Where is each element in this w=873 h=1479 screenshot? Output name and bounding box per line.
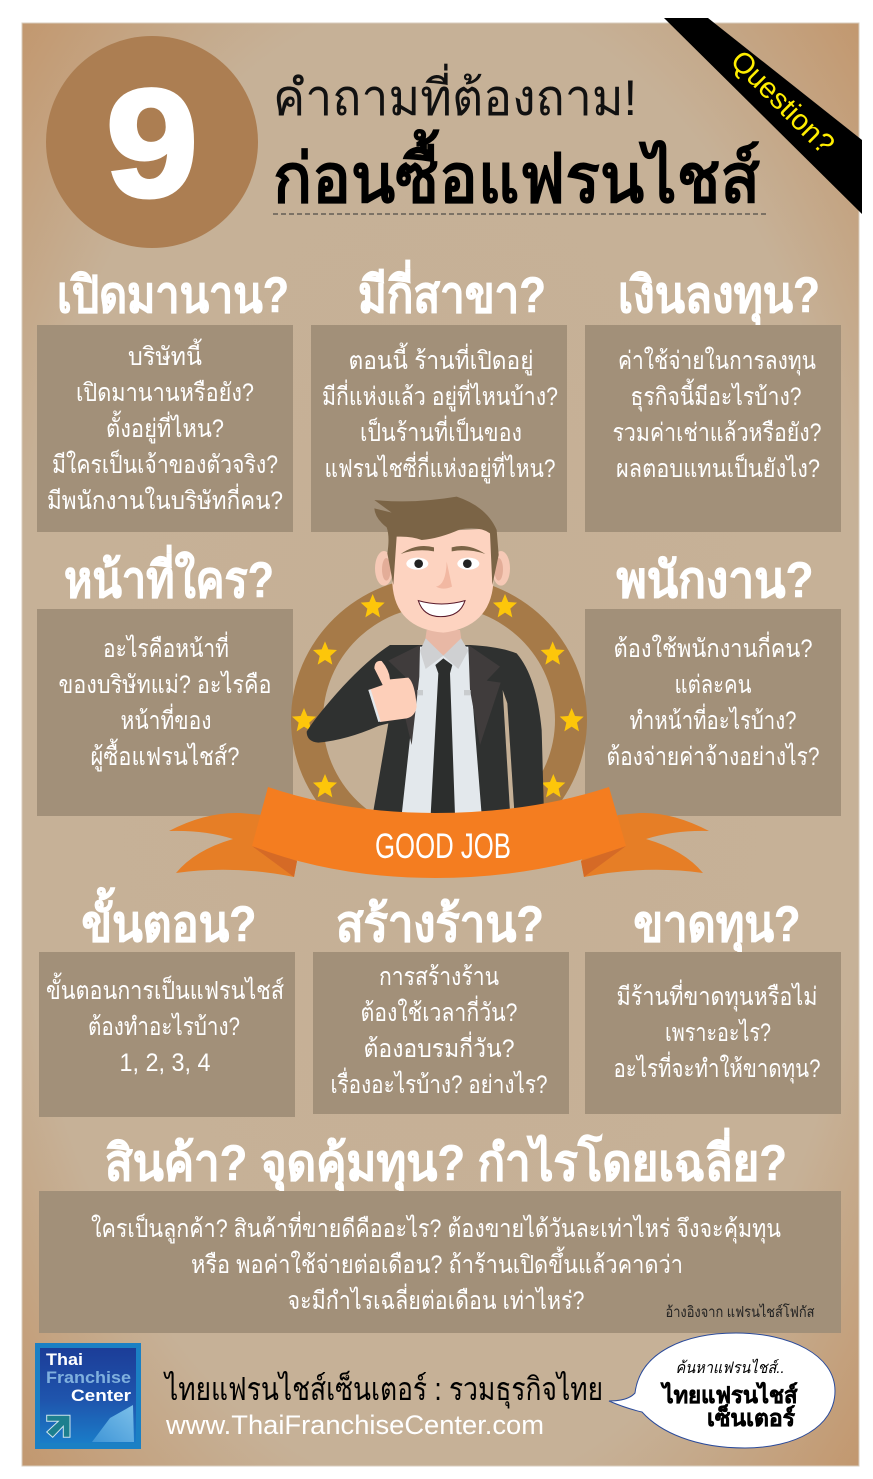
answer text: มีกี่แห่งแล้ว อยู่ที่ไหนบ้าง?: [322, 379, 558, 412]
answer text: การสร้างร้าน: [379, 963, 499, 991]
bubble name: ไทยแฟรนไชส์: [660, 1381, 798, 1408]
logo arrow: [47, 1415, 70, 1437]
heading: ขาดทุน?: [634, 896, 800, 955]
question 1: how long open: [37, 267, 293, 532]
heading: พนักงาน?: [616, 552, 814, 608]
answer text: เรื่องอะไรบ้าง? อย่างไร?: [330, 1067, 548, 1099]
answer text: [91, 1211, 781, 1315]
speech bubble: เซ็นเตอร์: [707, 1403, 796, 1431]
answer box: [313, 952, 569, 1114]
heading: เงินลงทุน?: [618, 267, 820, 326]
answer text: รวมค่าเช่าแล้วหรือยัง?: [612, 419, 822, 447]
answer text: ต้องใช้พนักงานกี่คน?: [614, 631, 812, 663]
answer text: ผู้ซื้อแฟรนไชส์?: [90, 738, 240, 772]
answer text: [46, 972, 284, 1077]
answer text: ใครเป็นลูกค้า? สินค้าที่ขายดีคืออะไร? ต้องขายได้วันละเท่าไหร่ จึงจะคุ้มทุน: [91, 1211, 781, 1244]
bubble caption: ค้นหาแฟรนไชส์..: [676, 1358, 784, 1377]
stars: [292, 594, 584, 797]
heading: เปิดมานาน?: [57, 267, 289, 323]
right ribbon tail: [581, 813, 709, 877]
lapels: [388, 645, 420, 745]
answer text: [47, 338, 283, 515]
smile: [418, 601, 465, 617]
shirt: [402, 647, 482, 815]
answer text: [614, 979, 820, 1084]
answer text: หน้าที่ของ: [120, 703, 212, 735]
answer box: [37, 609, 293, 816]
heading: หน้าที่ใคร?: [64, 545, 274, 608]
neck: [425, 630, 462, 656]
ears: [375, 551, 393, 586]
answer text: อะไรที่จะทำให้ขาดทุน?: [614, 1051, 820, 1084]
header: number nine title: [46, 36, 767, 248]
banner: good job: [169, 787, 709, 878]
answer text: [322, 342, 558, 484]
number 9: 9: [106, 58, 198, 229]
ribbon label: Question?: [724, 45, 840, 161]
answer text: ของบริษัทแม่? อะไรคือ: [58, 670, 272, 699]
source note: อ้างอิงจาก แฟรนไชส์โฟกัส: [666, 1303, 814, 1321]
nose: [436, 562, 452, 589]
question 9: product, break-even, average profit: [39, 1128, 841, 1333]
answer text: ค่าใช้จ่ายในการลงทุน: [618, 346, 816, 376]
answer text: [606, 631, 820, 771]
answer text: เป็นร้านที่เป็นของ: [360, 415, 522, 447]
answer text: จะมีกำไรเฉลี่ยต่อเดือน เท่าไหร่?: [288, 1283, 584, 1315]
answer text: มีใครเป็นเจ้าของตัวจริง?: [52, 449, 278, 479]
answer text: ต้องอบรมกี่วัน?: [364, 1031, 514, 1063]
answer text: ทำหน้าที่อะไรบ้าง?: [630, 703, 796, 735]
answer text: ตั้งอยู่ที่ไหน?: [106, 410, 224, 444]
left ribbon tail: [169, 813, 297, 877]
ribbon label: GOOD JOB: [375, 827, 511, 866]
heading: สินค้า? จุดคุ้มทุน? กำไรโดยเฉลี่ย?: [105, 1128, 787, 1194]
answer box: [311, 325, 567, 532]
logo text: Thai: [46, 1350, 83, 1369]
answer text: มีพนักงานในบริษัทกี่คน?: [47, 483, 283, 515]
question 6: steps: [39, 887, 295, 1117]
shirt buttons: [417, 690, 423, 695]
answer text: 1, 2, 3, 4: [120, 1049, 211, 1077]
answer text: ต้องทำอะไรบ้าง?: [88, 1012, 240, 1041]
title line one: คำถามที่ต้องถาม!: [273, 64, 637, 126]
question 3: investment money: [585, 267, 841, 532]
website: www.ThaiFranchiseCenter.com: [165, 1410, 544, 1440]
face: [392, 528, 493, 633]
heading: ขั้นตอน?: [82, 887, 256, 952]
question 4: whose duty: [37, 545, 293, 816]
answer box: [37, 325, 293, 532]
answer text: ผลตอบแทนเป็นยังไง?: [616, 453, 820, 483]
logo: Thai Franchise Center: Franchise: [46, 1368, 131, 1387]
site name: ไทยแฟรนไชส์เซ็นเตอร์ : รวมธุรกิจไทย: [163, 1370, 603, 1409]
thumbs-up hand: [368, 661, 417, 722]
title line two: ก่อนซื้อแฟรนไชส์: [273, 128, 760, 217]
footer text: [163, 1370, 603, 1440]
collar: [420, 638, 443, 669]
ribbon band: [252, 787, 626, 878]
answer box: [585, 325, 841, 532]
hair: [374, 497, 499, 585]
answer text: [330, 963, 548, 1099]
answer text: บริษัทนี้: [128, 338, 202, 371]
answer text: เปิดมานานหรือยัง?: [76, 379, 254, 407]
answer text: แต่ละคน: [674, 671, 752, 699]
answer box: [585, 609, 841, 816]
heading: สร้างร้าน?: [336, 896, 544, 952]
answer box: [585, 952, 841, 1114]
eyebrows: [401, 546, 434, 554]
question 7: building the shop: [313, 896, 569, 1114]
answer text: [58, 631, 272, 772]
number circle: [46, 36, 258, 248]
question 2: branches: [311, 260, 567, 532]
answer box: [39, 952, 295, 1117]
logo: Thai Franchise Center: Center: [71, 1386, 131, 1405]
answer text: อะไรคือหน้าที่: [103, 631, 229, 663]
answer text: มีร้านที่ขาดทุนหรือไม่: [616, 979, 818, 1012]
answer text: เพราะอะไร?: [665, 1018, 771, 1047]
answer text: หรือ พอค่าใช้จ่ายต่อเดือน? ถ้าร้านเปิดขึ้นแล้วคาดว่า: [191, 1246, 683, 1279]
answer box: [39, 1191, 841, 1333]
logo: Thai Franchise Center: [35, 1343, 141, 1449]
answer text: ต้องจ่ายค่าจ้างอย่างไร?: [606, 742, 820, 771]
corner ribbon: question: [664, 18, 862, 214]
illustration: businessman in star ring: [291, 497, 587, 864]
eyes: [406, 558, 428, 570]
heading: มีกี่สาขา?: [358, 260, 546, 323]
answer text: ต้องใช้เวลากี่วัน?: [360, 995, 518, 1027]
star ring: [291, 576, 587, 864]
question 8: loss: [585, 896, 841, 1114]
jacket: [307, 645, 544, 815]
answer text: ขั้นตอนการเป็นแฟรนไชส์: [46, 972, 284, 1005]
answer text: [612, 346, 822, 483]
speech bubble: [609, 1333, 835, 1448]
answer text: ตอนนี้ ร้านที่เปิดอยู่: [348, 342, 534, 376]
answer text: ธุรกิจนี้มีอะไรบ้าง?: [630, 378, 802, 412]
question 5: staff: [585, 552, 841, 816]
tie: [431, 658, 455, 815]
answer text: แฟรนไชซี่กี่แห่งอยู่ที่ไหน?: [324, 451, 556, 484]
